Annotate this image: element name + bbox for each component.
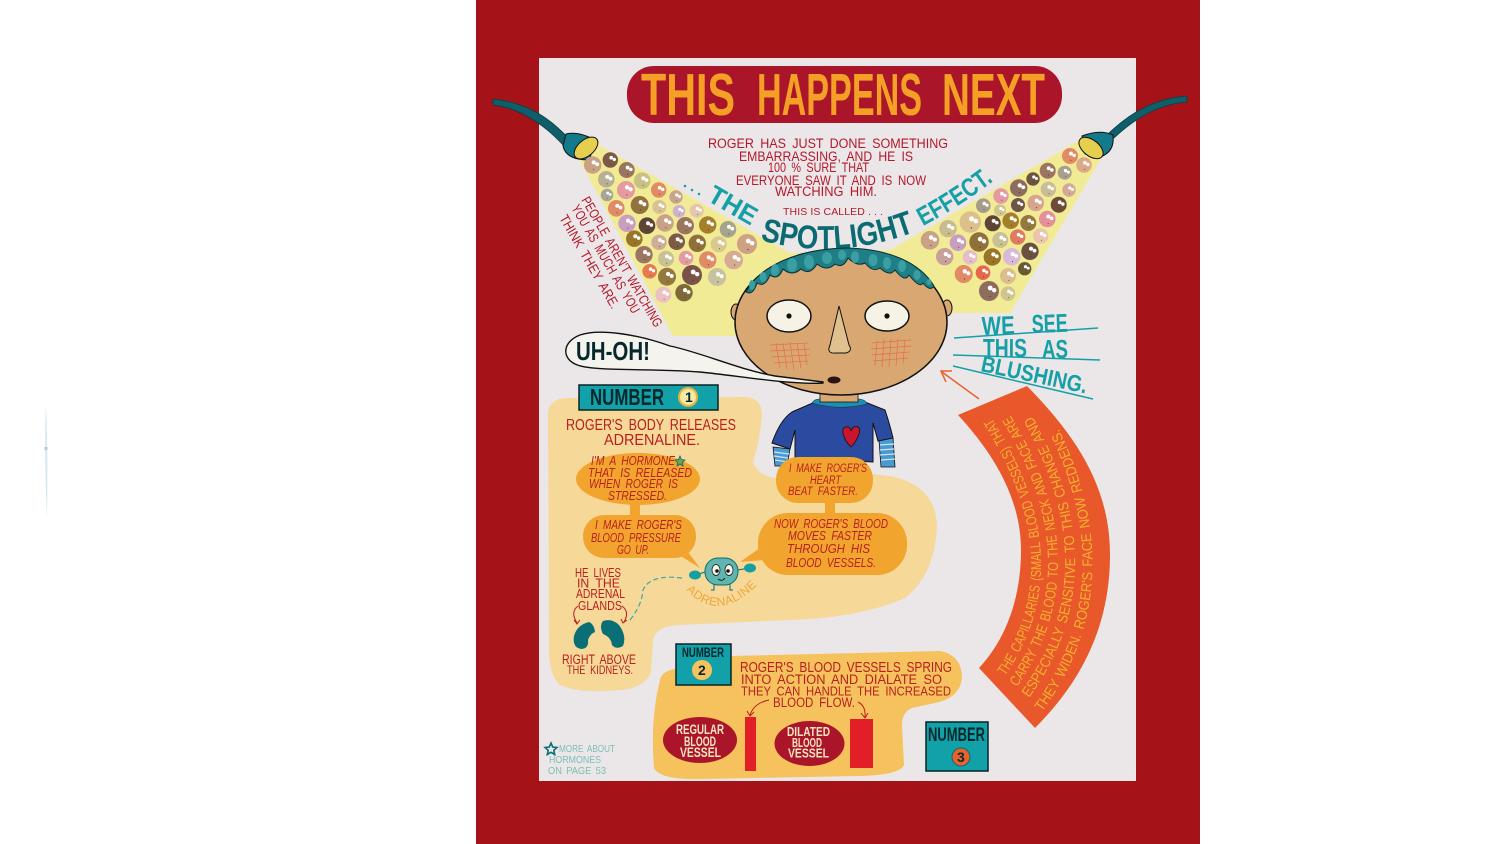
- bubble connectors: [630, 500, 835, 568]
- we see this as blushing: SEE: [1031, 308, 1068, 339]
- we see this as blushing: THIS: [983, 333, 1027, 363]
- intro text: ROGER HAS JUST DONE SOMETHING: [708, 136, 948, 151]
- text: right above the kidneys: [562, 652, 636, 677]
- bubble: heart beat faster: I MAKE ROGER'S: [789, 463, 867, 475]
- bubble: blood pressure: GO UP.: [617, 543, 649, 557]
- right spotlight lamp: [1075, 96, 1187, 163]
- intro text: [708, 136, 948, 199]
- footnote: more about hormones: [545, 743, 615, 777]
- text: right above the kidneys: RIGHT ABOVE: [562, 652, 636, 667]
- shirt and sleeves: [772, 399, 895, 467]
- number 2 label: 2: [698, 662, 706, 678]
- ears: [731, 300, 952, 320]
- text: he lives in the adrenal glands: [574, 566, 627, 624]
- pale panel: number 1: [548, 397, 937, 691]
- intro text: EMBARRASSING, AND HE IS: [739, 149, 913, 164]
- we see this as blushing: WE: [981, 310, 1015, 341]
- bubble: heart beat faster: [776, 457, 873, 503]
- character: Roger: [731, 248, 952, 467]
- text: he lives in the adrenal glands: ADRENAL: [576, 587, 625, 601]
- regular vessel bar: [745, 717, 756, 771]
- regular blood vessel: BLOOD: [684, 734, 716, 749]
- spotlight effect heading: THE: [711, 184, 759, 226]
- bubble: blood moves faster: THROUGH HIS: [787, 542, 871, 556]
- regular blood vessel: REGULAR: [676, 722, 724, 737]
- speech bubble: uh-oh: UH-OH!: [576, 336, 650, 366]
- spotlight effect heading: EFFECT.: [916, 168, 992, 226]
- number 3 label: NUMBER: [928, 725, 985, 746]
- heading: Roger's body releases adrenaline: ROGER'S BODY RELEASES: [566, 417, 736, 434]
- text: blood vessels spring into action: BLOOD FLOW.: [773, 695, 855, 710]
- nose: [829, 306, 850, 353]
- footnote: more about hormones: ON PAGE 53: [548, 765, 606, 777]
- text: he lives in the adrenal glands: HE LIVES: [575, 566, 621, 580]
- curved capillaries panel: ESPECIALLY SENSITIVE TO THIS CHANGE AND: [1022, 418, 1076, 697]
- hair: [746, 248, 934, 293]
- bubble: I'm a hormone: STRESSED.: [608, 489, 667, 503]
- number 2 label: [676, 644, 731, 685]
- number 3 label: [926, 722, 988, 771]
- intro text: 100 % SURE THAT: [768, 160, 869, 175]
- dashed path from glands: [630, 577, 682, 620]
- crowd of faces, right beam: [921, 148, 1092, 301]
- arrows to blood vessels: [747, 700, 868, 718]
- title banner: [627, 62, 1062, 128]
- blush marks: [770, 339, 911, 370]
- side note: people aren't watching: YOU AS MUCH AS YOU: [568, 202, 643, 316]
- eyes: [767, 300, 909, 332]
- paper panel: [539, 58, 1136, 781]
- bubble: blood moves faster: [758, 513, 907, 575]
- spotlight effect heading: [684, 168, 992, 249]
- dilated blood vessel: VESSEL: [788, 746, 829, 760]
- this is called text: THIS IS CALLED . . .: [783, 206, 883, 218]
- regular blood vessel: VESSEL: [680, 745, 721, 760]
- icon: adrenal glands: [574, 620, 624, 649]
- dilated vessel bar: [850, 719, 873, 768]
- dilated blood vessel: BLOOD: [792, 736, 822, 750]
- title banner: THIS: [641, 62, 735, 128]
- spotlight beams: [578, 140, 1102, 336]
- spotlight effect heading: SPOTLIGHT: [762, 210, 909, 249]
- speech bubble: uh-oh: [566, 332, 823, 383]
- crowd of faces, left beam: [584, 152, 757, 303]
- mouth: [828, 376, 840, 384]
- number 1 label: NUMBER: [590, 384, 664, 410]
- number 2 label: NUMBER: [682, 644, 724, 660]
- bubble: blood pressure: BLOOD PRESSURE: [591, 531, 681, 545]
- intro text: EVERYONE SAW IT AND IS NOW: [736, 173, 926, 188]
- adrenaline label: ADRENALINE: [686, 580, 756, 606]
- text: right above the kidneys: THE KIDNEYS.: [567, 663, 633, 677]
- bubble: I'm a hormone: I'M A HORMONE: [591, 454, 676, 468]
- regular blood vessel: [663, 717, 737, 763]
- orange panel: number 2: [653, 651, 962, 779]
- dilated blood vessel: [774, 721, 844, 766]
- bubble: blood pressure: I MAKE ROGER'S: [595, 518, 683, 532]
- bubble: blood moves faster: MOVES FASTER: [788, 529, 872, 543]
- head: [735, 249, 947, 395]
- bubble: heart beat faster: HEART: [810, 475, 842, 487]
- bubble: blood moves faster: BLOOD VESSELS.: [786, 556, 876, 570]
- heart: [843, 426, 860, 447]
- faint vertical artifact at left: [44, 404, 48, 518]
- side note: people aren't watching: THINK THEY ARE.: [556, 212, 622, 311]
- dilated blood vessel: DILATED: [787, 725, 830, 739]
- neck: [820, 390, 858, 402]
- side note: people aren't watching: PEOPLE AREN'T WATCHING: [578, 194, 665, 330]
- curved capillaries panel: [958, 386, 1110, 728]
- bubble: I'm a hormone: WHEN ROGER IS: [589, 477, 679, 491]
- we see this as blushing: BLUSHING.: [979, 350, 1090, 398]
- we see this as blushing: AS: [1042, 334, 1068, 364]
- footnote: more about hormones: MORE ABOUT: [559, 743, 615, 755]
- heading: Roger's body releases adrenaline: [566, 417, 736, 449]
- curved capillaries panel: THEY WIDEN. ROGER'S FACE NOW REDDENS.: [1034, 430, 1092, 710]
- text: blood vessels spring into action: [740, 660, 952, 710]
- text: blood vessels spring into action: THEY CAN HANDLE THE INCREASED: [741, 684, 951, 698]
- text: blood vessels spring into action: INTO ACTION AND DIALATE SO: [741, 672, 942, 687]
- number 1 label: 1: [685, 389, 693, 405]
- bubble: heart beat faster: BEAT FASTER.: [788, 486, 858, 498]
- bubble: blood pressure: [583, 515, 696, 558]
- intro text: WATCHING HIM.: [775, 184, 877, 199]
- text: he lives in the adrenal glands: IN THE: [577, 576, 620, 590]
- we see this as blushing: [953, 308, 1100, 399]
- title banner: HAPPENS: [757, 62, 922, 128]
- bubble: I'm a hormone: THAT IS RELEASED: [588, 466, 692, 480]
- red poster backing: [476, 0, 1200, 844]
- left spotlight lamp: [493, 99, 602, 163]
- bubble: blood moves faster: NOW ROGER'S BLOOD: [774, 517, 888, 531]
- footnote: more about hormones: HORMONES: [549, 754, 601, 766]
- curved capillaries panel: CARRY THE BLOOD TO THE NECK AND FACE ARE: [1002, 416, 1058, 685]
- title banner: NEXT: [942, 62, 1045, 128]
- heading: Roger's body releases adrenaline: ADRENALINE.: [604, 432, 700, 449]
- text: blood vessels spring into action: ROGER'S BLOOD VESSELS SPRING: [740, 660, 952, 676]
- adrenaline character: [689, 558, 756, 590]
- text: he lives in the adrenal glands: GLANDS: [578, 599, 622, 613]
- bubble: I'm a hormone: [576, 453, 700, 505]
- arrow to cheek: [941, 371, 979, 399]
- number 3 label: 3: [957, 749, 965, 765]
- curved capillaries panel: THE CAPILLARIES (SMALL BLOOD VESSELS) THAT: [984, 420, 1044, 674]
